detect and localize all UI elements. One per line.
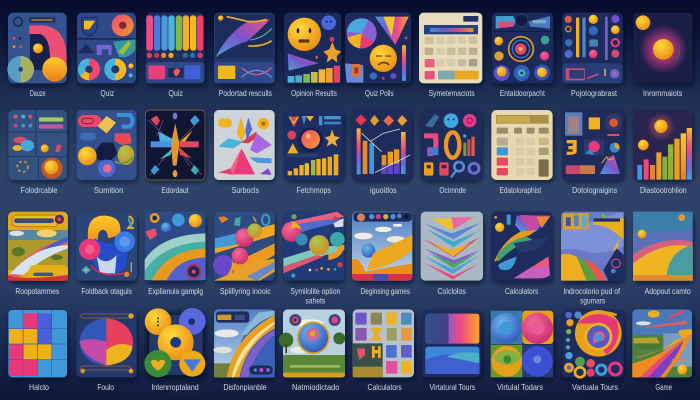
tile: Disfonpianble (213, 309, 275, 392)
tile: Virtulal Todars (491, 311, 555, 392)
tile: Fetchmops: Fetchmops (296, 185, 331, 195)
tile: Dotolograigins (562, 110, 624, 195)
tile: Game (632, 309, 693, 392)
tile: Pojotograbrast: Pojotograbrast (571, 88, 618, 98)
tile: Symilolite: Symilolite option (290, 286, 341, 296)
tile: Quiz Polls: Quiz Polls (365, 88, 394, 98)
tile: Adopout camto: Adopout camto (645, 286, 691, 296)
tile: Foulo (76, 310, 138, 392)
tile: Edordaut (145, 110, 206, 195)
tile: Calculators grid (353, 309, 415, 392)
tile: Foulo: Foulo (97, 382, 114, 392)
tile: Sumition (76, 110, 138, 195)
tile: Halcto grid (8, 310, 68, 392)
tile: Inrommaiots: Inrommaiots (643, 88, 682, 98)
tile: Disfonpianble: Disfonpianble (223, 382, 267, 392)
tile: Foldback: Foldback otaguis (81, 286, 132, 296)
tile: Calculators grid: Calculators (367, 382, 402, 392)
tile: Calcolators: Calcolators (505, 286, 538, 296)
tile: iguoitlos chart: iguoitlos (370, 185, 397, 195)
tile: Adopout camto (633, 212, 694, 296)
tile: Quiz 2 (146, 13, 206, 98)
tile: Vartuala Tours (562, 309, 624, 392)
tile: Quiz 1: Quiz (100, 88, 114, 98)
tile: Diastootrohiion: Diastootrohiion (640, 185, 687, 195)
tile: Deginsing games: Deginsing games (361, 286, 410, 296)
tile: Entatdoorpacht (492, 13, 555, 98)
tile: Natmiodictado: Natmiodictado (292, 382, 340, 392)
tile: Quiz 1 (77, 13, 137, 98)
tile: Ocimnde (421, 110, 482, 195)
tile: Virtulal Todars: Virtulal Todars (497, 382, 543, 392)
tile: Fetchmops (284, 110, 345, 195)
tile: Predicted results (214, 13, 275, 98)
tile: Colclolos: Colclolos (437, 286, 466, 296)
tile: Natmiodictado (279, 309, 346, 392)
tile: Folodrcable: Folodrcable (21, 185, 58, 195)
tile: Intenrroptaland: Intenrroptaland (151, 382, 199, 392)
tile: Symilolite (282, 212, 345, 306)
tile: Edatoloraphist calculator (491, 110, 554, 195)
tile: Spiillyring: Spiillyring inooic (220, 286, 271, 296)
tile: Roopotammes (8, 212, 68, 296)
tile: Ocimnde: Ocimnde (439, 185, 466, 195)
tile: Pojotograbrast (562, 13, 624, 98)
tile: Dauze (7, 13, 68, 98)
tile: Entatdoorpacht: Entatdoorpacht (500, 88, 545, 98)
tile: Spiillyring (213, 212, 275, 296)
tile: Symetemaciots calculator (419, 13, 484, 98)
tile: Symetemaciots calculator: Symetemaciots (429, 88, 475, 98)
tile: Opinion Results (284, 13, 344, 98)
tile: Indrocolorio: Indrocolorio pud of (563, 286, 621, 296)
tile: Roopotammes: Roopotammes (15, 286, 59, 296)
tile: Surbocls (214, 110, 275, 195)
tile: Explianuia (145, 212, 206, 296)
tile: Foldback (76, 212, 137, 296)
tile: Opinion Results: Opinion Results (291, 88, 337, 98)
tile: Predicted results: Podortad resculls (219, 88, 272, 98)
tile: Game: Game (655, 382, 672, 392)
tile: Explianuia: Explianuia gamplg (148, 286, 203, 296)
tile: Dauze: Dauze (30, 88, 46, 98)
tile: Virtatural Tours: Virtatural Tours (429, 382, 475, 392)
tile: Surbocls: Surbocls (232, 185, 259, 195)
tile: Edatoloraphist calculator: Edatoloraphist (499, 185, 542, 195)
tile: Quiz Polls (345, 13, 412, 98)
tile: Calcolators (491, 212, 553, 296)
tile: Dotolograigins: Dotolograigins (572, 185, 617, 195)
tile: Inrommaiots (633, 13, 694, 98)
tile: Quiz 2: Quiz (168, 88, 183, 98)
tile: Folodrcable (8, 110, 67, 195)
tile: Vartuala Tours: Vartuala Tours (572, 382, 618, 392)
tile: Sumition: Sumition (94, 185, 124, 195)
tile: Deginsing games (352, 212, 413, 296)
tile: iguoitlos chart (352, 110, 412, 195)
tile: Symilolite: sahets (305, 296, 325, 306)
tile: Edordaut: Edordaut (161, 185, 189, 195)
tile: Indrocolorio: sgumars (580, 296, 605, 306)
tile: Indrocolorio (561, 212, 624, 306)
tile: Diastootrohiion (633, 110, 694, 195)
tile: Intenrroptaland (144, 308, 206, 392)
tile: Halcto grid: Halcto (29, 382, 49, 392)
tile: Virtatural Tours (422, 310, 482, 392)
tile: Colclolos (421, 212, 484, 296)
